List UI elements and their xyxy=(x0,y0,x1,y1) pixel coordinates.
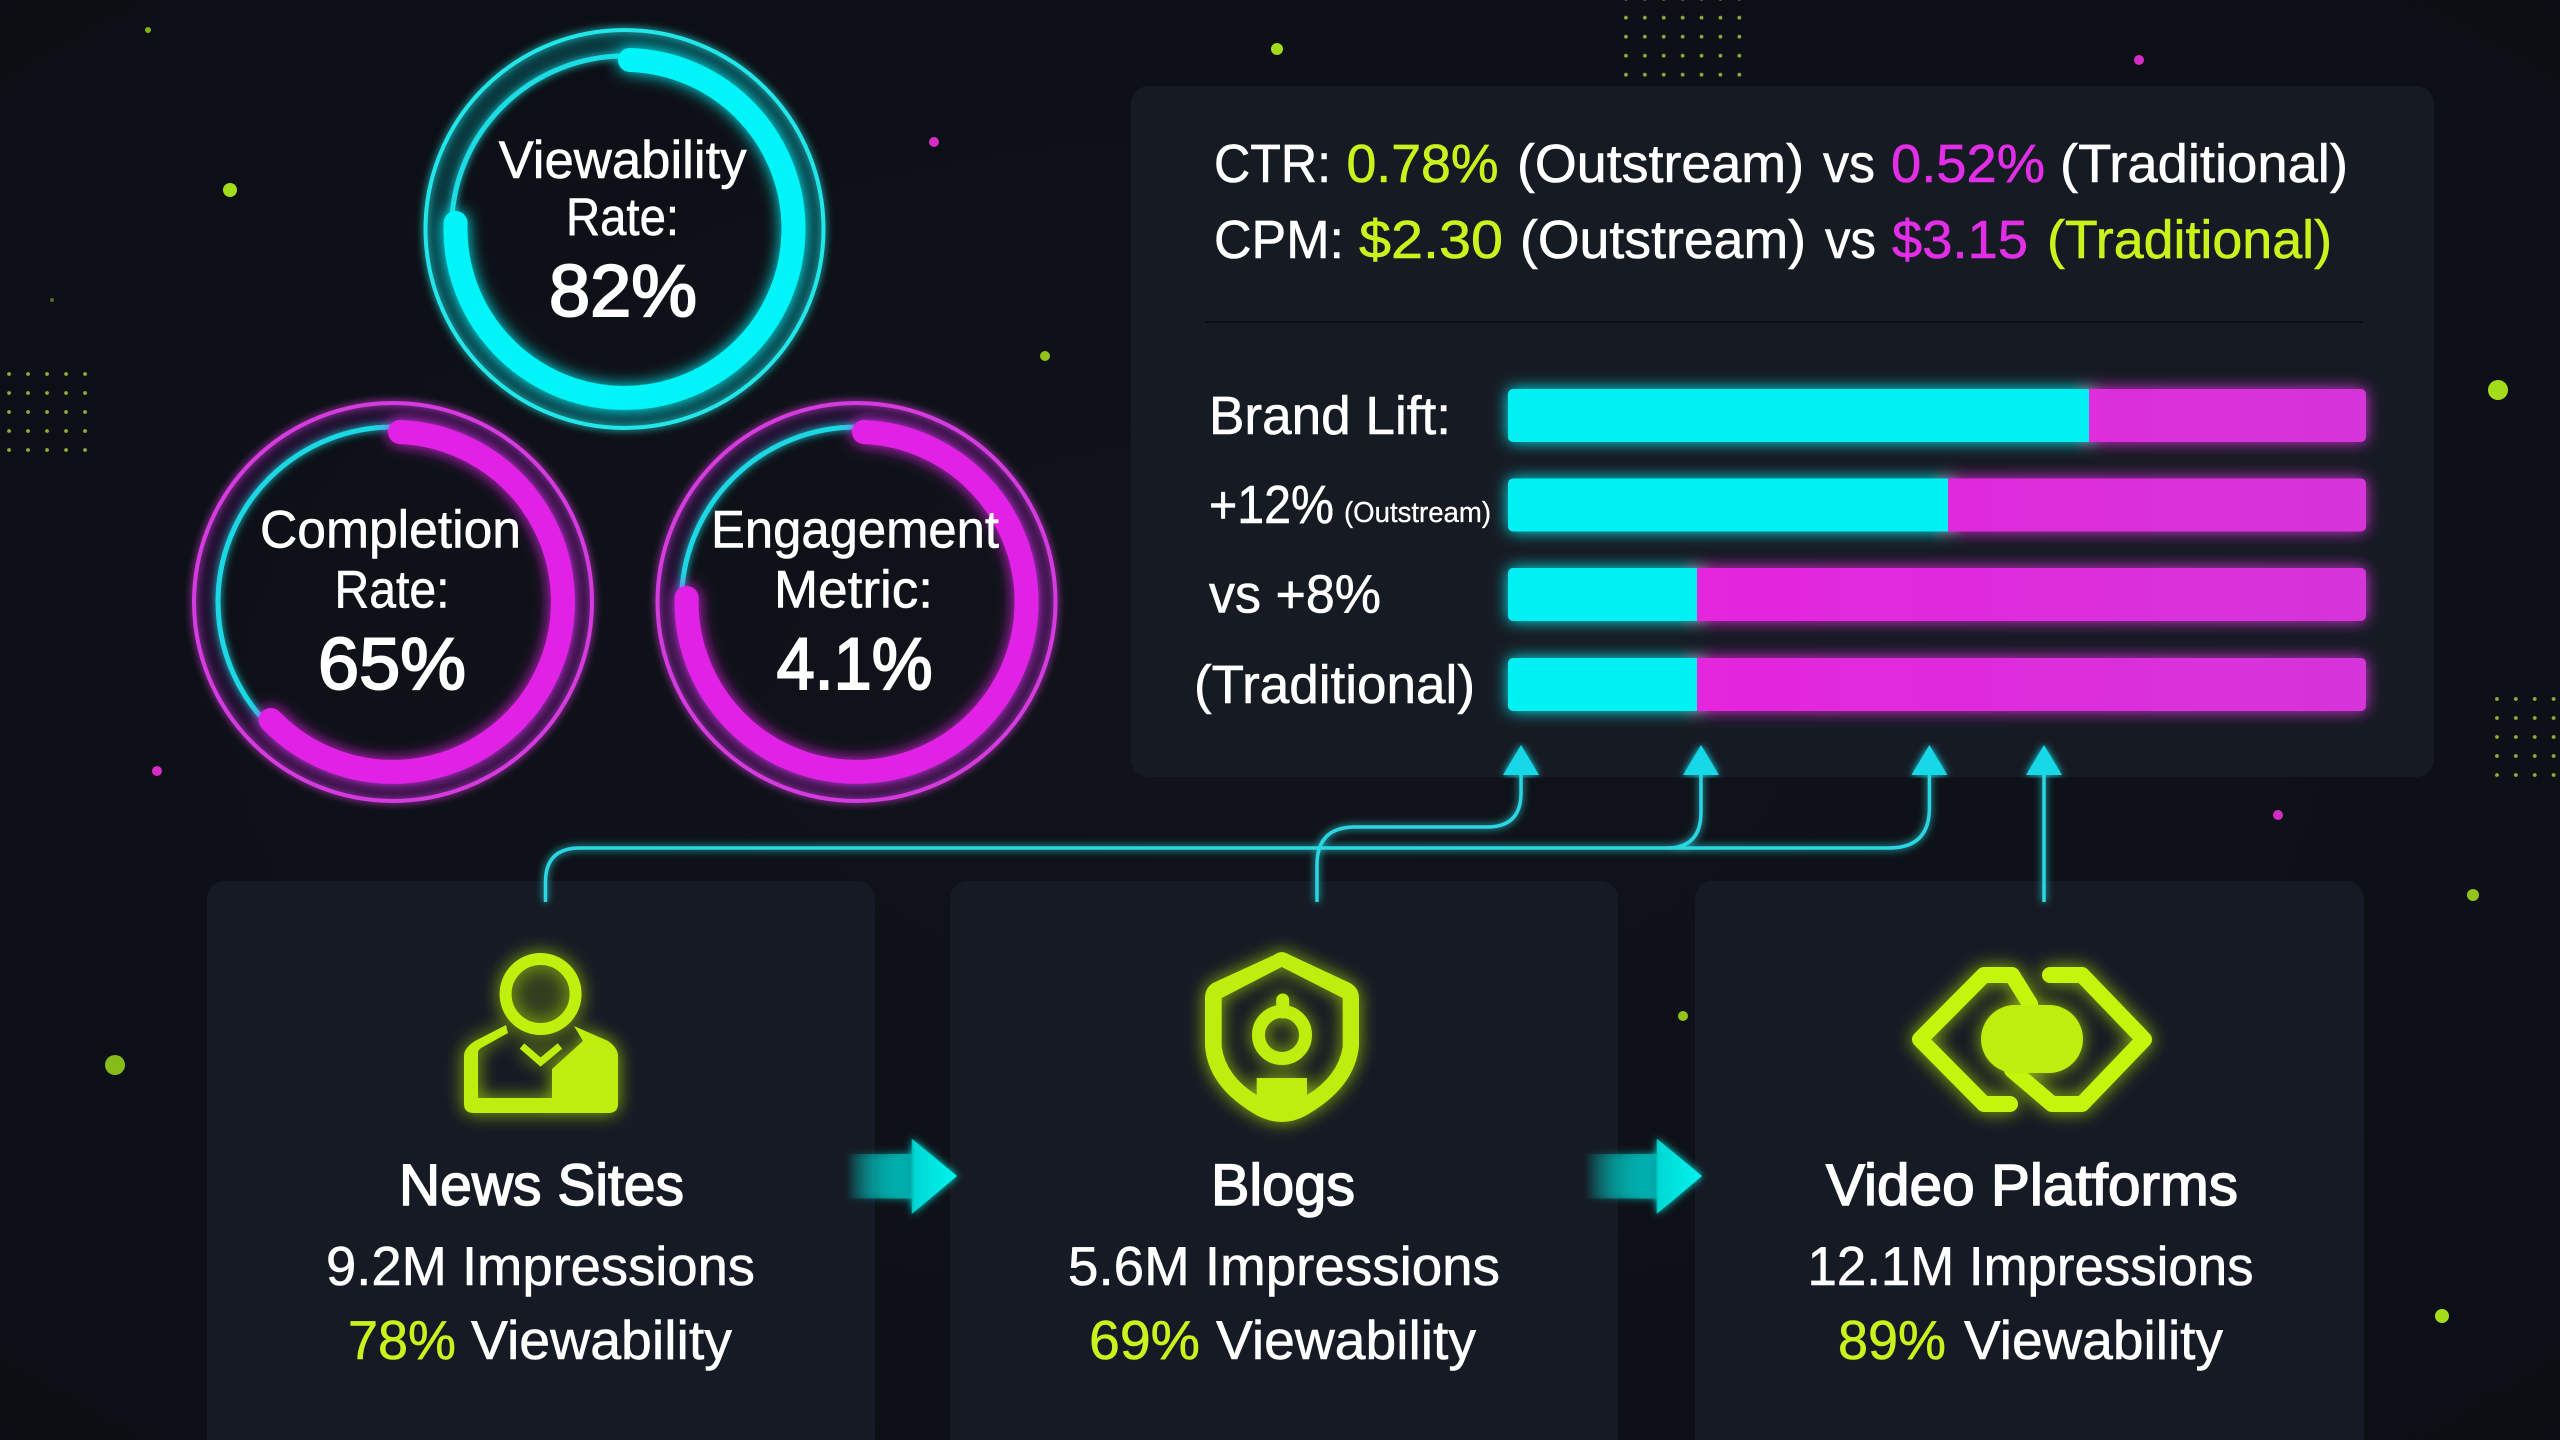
connector arrows to bars xyxy=(546,745,2062,902)
gauge: completion rate: 65% xyxy=(318,624,466,705)
brand lift labels: (Outstream) xyxy=(1344,497,1491,529)
CTR comparison: 0.78% xyxy=(1346,134,1498,194)
CPM comparison: CPM: xyxy=(1214,210,1344,270)
brand lift labels xyxy=(1194,386,1491,715)
panel: video platforms xyxy=(1695,881,2364,1440)
CTR comparison: CTR: xyxy=(1214,134,1331,194)
CTR comparison xyxy=(1214,134,2348,194)
card text: news sites: 78% xyxy=(348,1309,456,1371)
icon: shield webcam xyxy=(1205,952,1359,1122)
CPM comparison: $3.15 xyxy=(1892,210,2028,270)
card text: blogs: Blogs xyxy=(1211,1153,1355,1218)
CTR comparison: (Outstream) xyxy=(1517,134,1804,194)
brand lift labels: vs +8% xyxy=(1209,564,1381,624)
gauge: viewability rate: Viewability xyxy=(499,131,747,190)
arrow: news to blogs xyxy=(846,1139,957,1214)
panel: news sites xyxy=(207,881,875,1440)
card text: news sites xyxy=(326,1153,755,1371)
card text: video platforms: Viewability xyxy=(1964,1309,2223,1371)
bar 3 xyxy=(1508,568,2366,621)
CTR comparison: vs xyxy=(1823,134,1875,194)
brand lift labels: (Traditional) xyxy=(1194,655,1475,715)
icon: person xyxy=(464,959,618,1113)
CPM comparison: $2.30 xyxy=(1359,210,1503,270)
gauge: completion rate xyxy=(194,403,592,801)
CPM comparison xyxy=(1214,210,2332,270)
gauge: completion rate: Rate: xyxy=(334,561,450,620)
brand lift labels: Brand Lift: xyxy=(1209,386,1451,446)
gauge: engagement metric xyxy=(658,403,1056,801)
bar 1 xyxy=(1508,389,2366,442)
CTR comparison: (Traditional) xyxy=(2060,134,2348,194)
card text: video platforms: 12.1M Impressions xyxy=(1808,1235,2254,1297)
card text: news sites: Viewability xyxy=(471,1309,732,1371)
gauge: viewability rate: Rate: xyxy=(566,188,679,247)
CPM comparison: vs xyxy=(1825,210,1876,270)
gauge: viewability rate xyxy=(426,30,824,428)
card text: blogs: 69% xyxy=(1089,1309,1200,1371)
gauge: engagement metric: 4.1% xyxy=(777,624,933,705)
panel: blogs xyxy=(950,881,1618,1440)
panel: comparison metrics xyxy=(1131,86,2434,777)
card text: blogs: Viewability xyxy=(1216,1309,1476,1371)
CPM comparison: (Traditional) xyxy=(2047,210,2332,270)
bar chart: brand lift xyxy=(1508,389,2366,711)
gauge: viewability rate: 82% xyxy=(549,251,697,332)
card text: news sites: News Sites xyxy=(399,1153,684,1218)
icon: video hexagon link xyxy=(1920,975,2144,1104)
gauge: completion rate: Completion xyxy=(260,501,521,560)
card text: video platforms xyxy=(1808,1153,2254,1371)
card text: blogs xyxy=(1068,1153,1500,1371)
bar 4 xyxy=(1508,658,2366,711)
gauge: engagement metric: Metric: xyxy=(774,561,933,620)
card text: video platforms: Video Platforms xyxy=(1826,1153,2238,1218)
CPM comparison: (Outstream) xyxy=(1520,210,1806,270)
brand lift labels: +12% xyxy=(1209,475,1334,535)
arrow: blogs to video xyxy=(1585,1139,1702,1214)
card text: blogs: 5.6M Impressions xyxy=(1068,1235,1500,1297)
card text: video platforms: 89% xyxy=(1838,1309,1946,1371)
gauge: engagement metric: Engagement xyxy=(711,501,999,560)
card text: news sites: 9.2M Impressions xyxy=(326,1235,755,1297)
CTR comparison: 0.52% xyxy=(1891,134,2045,194)
bar 2 xyxy=(1508,478,2366,532)
